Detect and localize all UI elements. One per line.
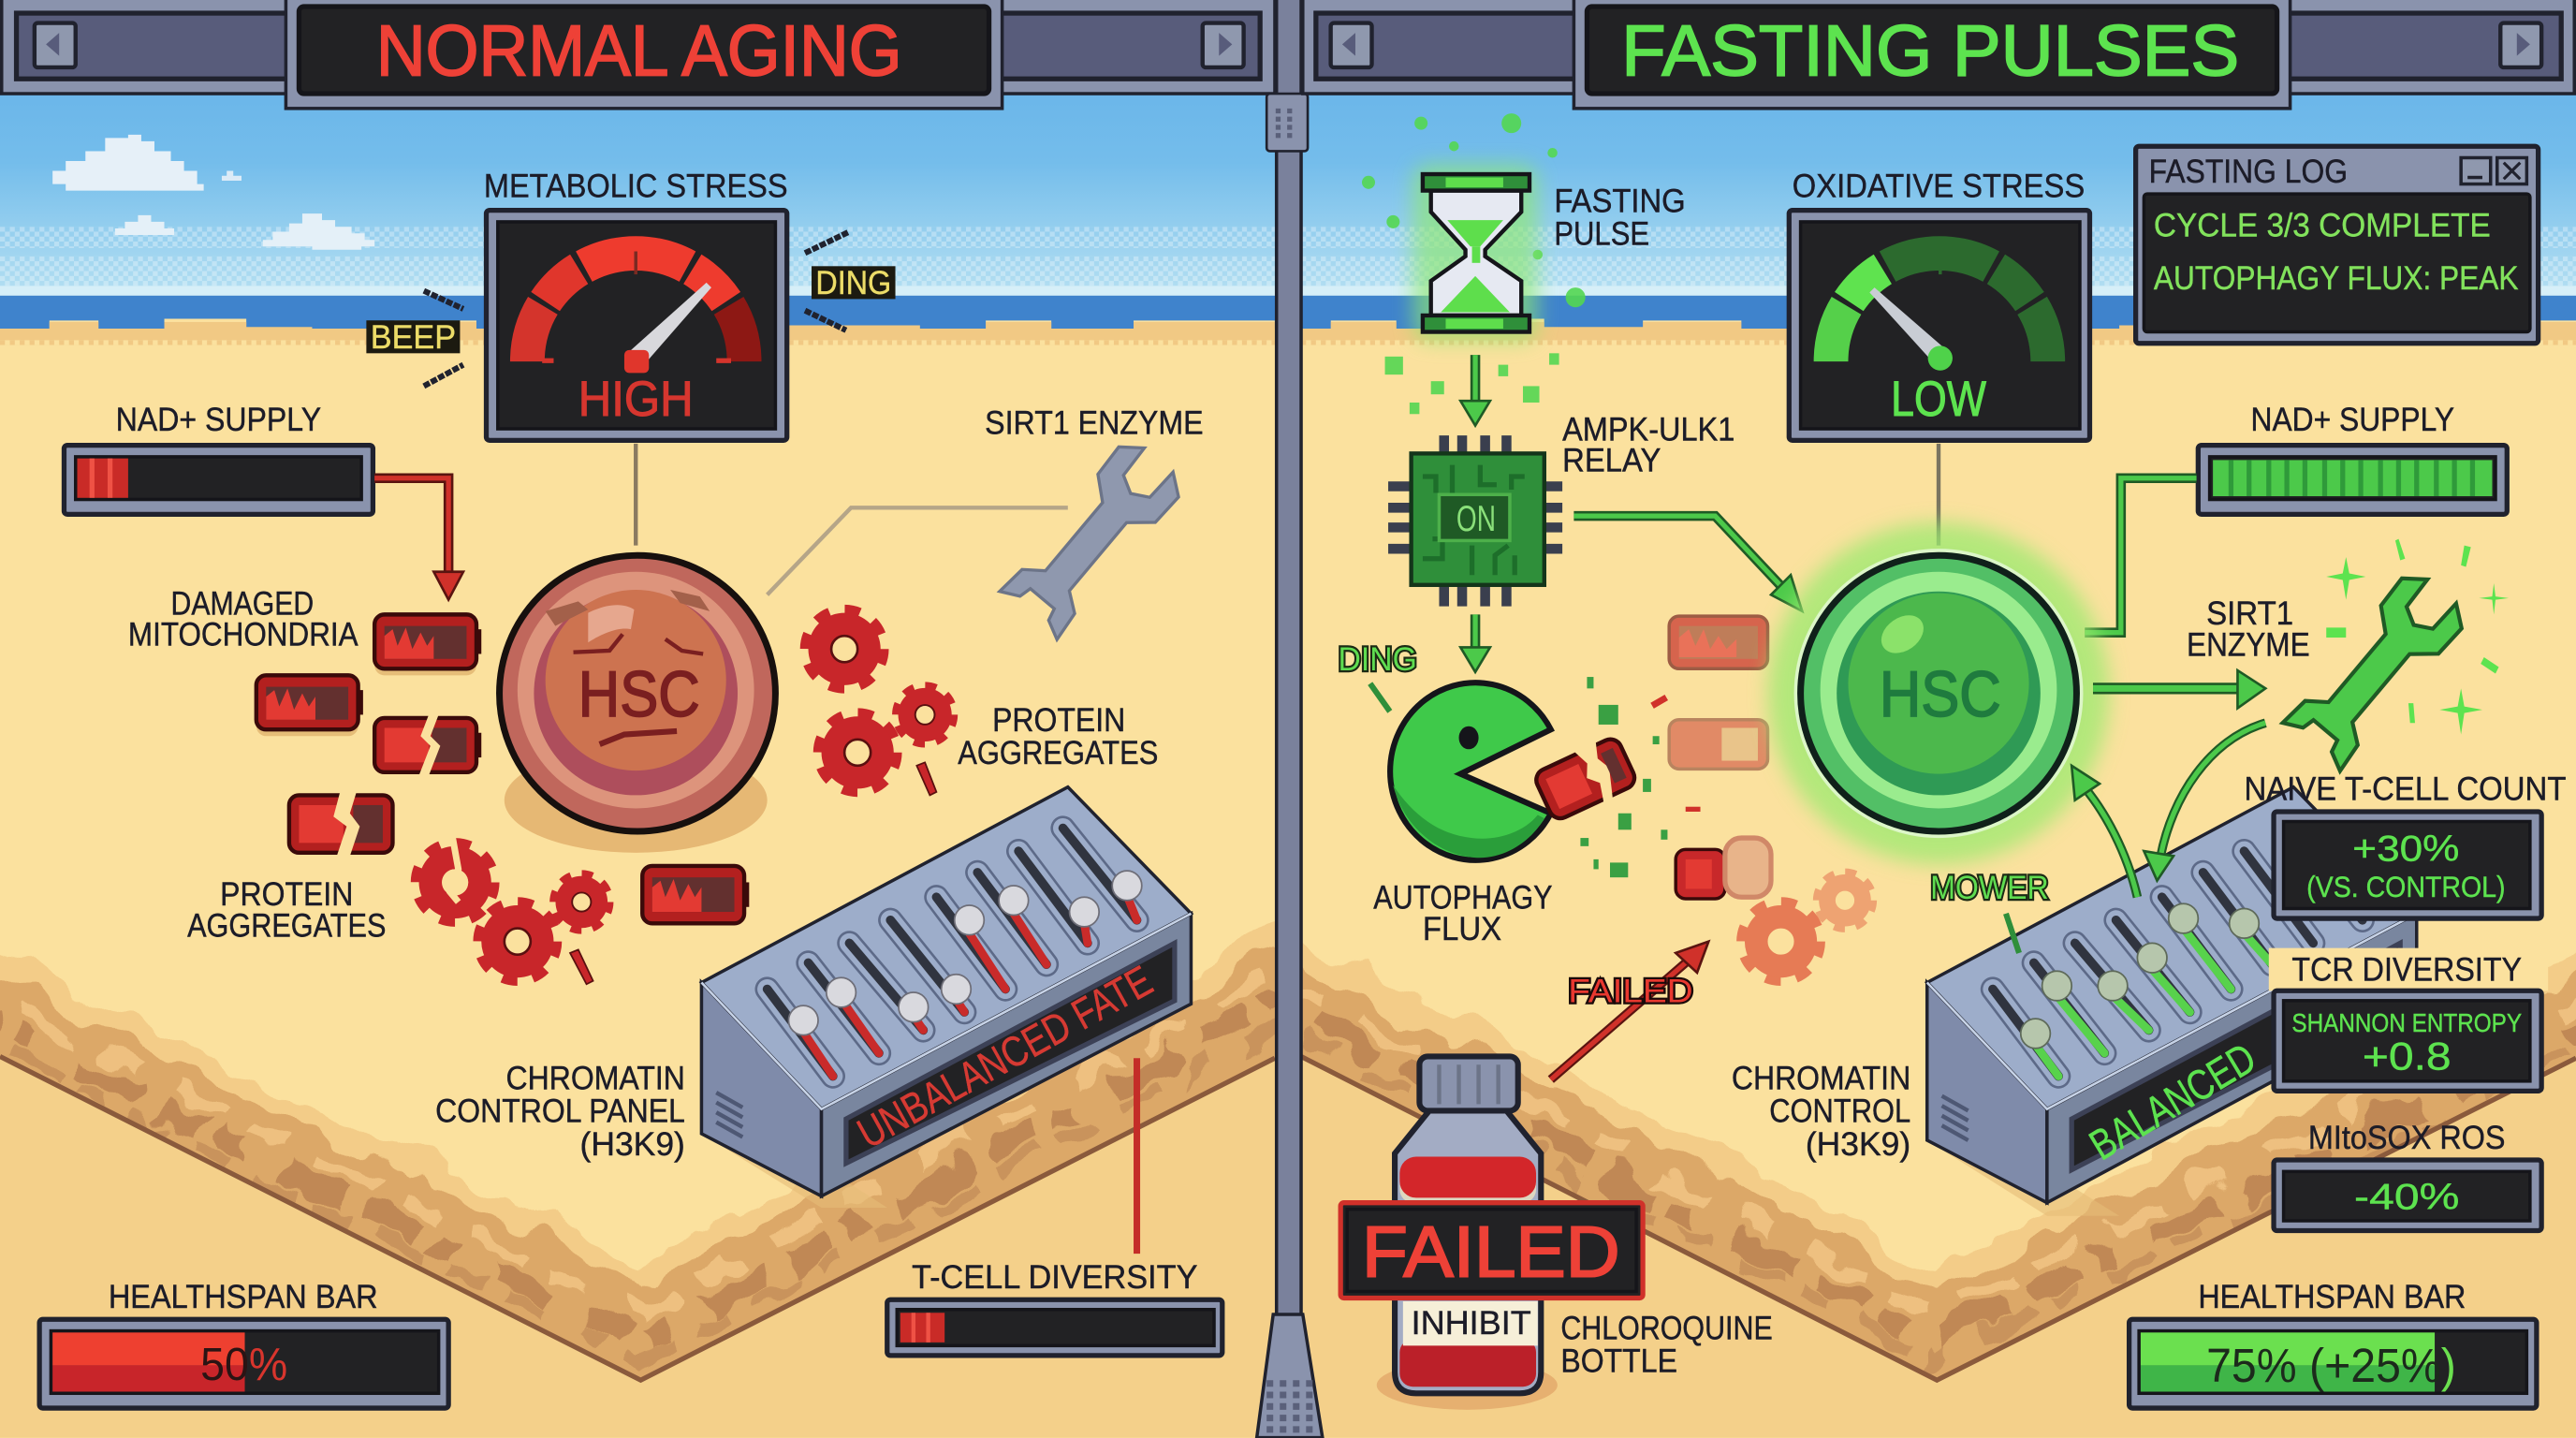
icon: hourglass (1412, 165, 1538, 342)
label: sirt1 enzyme right: SIRT1 (2206, 595, 2293, 632)
label: chromatin control: CONTROL (1769, 1093, 1910, 1130)
label: chloroquine bottle: CHLOROQUINE (1560, 1310, 1773, 1346)
cloud: tiny (222, 171, 242, 181)
chromatin control panel balanced: BALANCED (2082, 1034, 2263, 1169)
title: normal aging: NORMAL AGING (376, 11, 902, 92)
center divider (1257, 0, 1323, 1438)
readout: tcr diversity: SHANNON ENTROPY (2291, 1008, 2522, 1037)
label: ding right (1339, 641, 1417, 712)
icon: eaten mitochondrion (1530, 729, 1640, 825)
sound effect: ding: DING (815, 265, 891, 301)
gauge: metabolic stress high: HIGH (578, 372, 694, 427)
label: fasting pulse: PULSE (1554, 215, 1649, 252)
label: metabolic stress: METABOLIC STRESS (484, 169, 788, 205)
arrow: nad+ to mitochondria (374, 478, 463, 600)
label: chromatin control: CHROMATIN (1732, 1061, 1910, 1097)
readout: naive t-cell count: (VS. CONTROL) (2306, 870, 2506, 903)
icon: red gear 4 (481, 905, 553, 977)
label: damaged mitochondria: MITOCHONDRIA (128, 617, 359, 653)
arrow: relay to hsc (1573, 516, 1802, 611)
label: tcr diversity: TCR DIVERSITY (2291, 952, 2522, 989)
sparkles around wrench (2326, 539, 2509, 734)
label: chromatin control (1732, 1061, 1910, 1163)
label: autophagy flux (1373, 880, 1553, 947)
icon: damaged mitochondrion 5 (642, 866, 749, 923)
button left (35, 23, 76, 67)
icon: chloroquine bottle: INHIBIT (1412, 1305, 1531, 1342)
label: mower: MOWER (1930, 870, 2049, 906)
window: fasting log: AUTOPHAGY FLUX: PEAK (2154, 260, 2519, 297)
label: sirt1 enzyme: SIRT1 ENZYME (985, 404, 1204, 441)
readout: tcr diversity (2274, 990, 2541, 1091)
bar: healthspan 50 percent (39, 1319, 448, 1408)
button left (1331, 23, 1372, 67)
icon: fading mitochondrion 2 (1669, 720, 1767, 769)
icon: gear fragment right (916, 762, 936, 795)
icon: gear fragment left (570, 949, 593, 984)
icon: damaged mitochondrion 2 (256, 675, 363, 736)
icon: fading mitochondrion 1 (1669, 616, 1767, 668)
icon: grey wrench (999, 435, 1189, 640)
label: ding right: DING (1339, 641, 1417, 678)
window: fasting log (2136, 146, 2539, 344)
icon: autophagy pacman (1390, 682, 1551, 860)
label: mitosox ros: MItoSOX ROS (2308, 1120, 2506, 1156)
icon: red gear 1 (809, 613, 881, 685)
label: fasting pulse (1554, 183, 1686, 252)
sound effect: beep (366, 291, 463, 386)
icon: healthy hsc cell (1767, 522, 2110, 864)
arrow: nad+ to hsc (2085, 478, 2197, 633)
readout: naive t-cell count: +30% (2352, 829, 2459, 870)
icon: ampk-ulk1 chip: ON (1456, 499, 1496, 539)
sound effect: beep: BEEP (371, 319, 456, 356)
icon: stressed hsc cell: HSC (578, 658, 700, 730)
bar: nad+ supply low (64, 446, 373, 514)
label: chromatin control: (H3K9) (1806, 1126, 1910, 1163)
connector: panel to t-cell diversity (1135, 1058, 1139, 1254)
header bar left (2, 0, 1275, 109)
bar: healthspan 75 percent: 75% (+25%) (2206, 1339, 2456, 1392)
chromatin control panel balanced (1927, 787, 2417, 1216)
label: fasting pulse: FASTING (1554, 183, 1686, 219)
bar: nad+ supply full (2198, 446, 2507, 514)
label: autophagy flux: AUTOPHAGY (1373, 880, 1553, 917)
icon: stressed hsc cell (500, 555, 775, 853)
icon: chloroquine bottle (1377, 1056, 1558, 1410)
icon: red gear 2 (899, 688, 952, 741)
button right (1203, 23, 1244, 67)
label: protein aggregates left: AGGREGATES (187, 907, 386, 944)
label: failed small: FAILED (1568, 974, 1693, 1010)
label: chromatin control panel (435, 1061, 685, 1163)
label: sirt1 enzyme right: ENZYME (2187, 626, 2310, 663)
title: fasting pulses: FASTING PULSES (1621, 11, 2239, 92)
label: protein aggregates left: PROTEIN (220, 876, 353, 913)
stamp: failed: FAILED (1362, 1212, 1620, 1293)
label: damaged mitochondria (128, 585, 359, 653)
panel: normal aging (2, 0, 1275, 1408)
readout: tcr diversity: +0.8 (2363, 1034, 2452, 1078)
icon: fading mitochondrion 3 (1676, 838, 1771, 899)
label: chloroquine bottle: BOTTLE (1560, 1343, 1677, 1379)
icon: broken red gear (419, 833, 491, 918)
gauge: oxidative stress low: LOW (1891, 372, 1986, 427)
icon: fading gear large (1745, 905, 1817, 977)
label: chromatin control panel: (H3K9) (580, 1126, 685, 1163)
chromatin control panel unbalanced: UNBALANCED FATE (850, 957, 1160, 1157)
readout: naive t-cell count (2274, 812, 2541, 918)
connector: gauge to hsc (635, 444, 637, 546)
arrow: wrench to panel (2144, 723, 2265, 881)
bar: healthspan 75 percent (2130, 1319, 2537, 1408)
sand backing behind readouts (2269, 948, 2548, 990)
icon: damaged mitochondrion 1 (374, 614, 481, 675)
icon: broken mitochondrion 3 (374, 714, 481, 775)
label: chromatin control panel: CONTROL PANEL (435, 1093, 685, 1130)
readout: mitosox ros (2274, 1160, 2541, 1231)
arrow: panel to hsc (2071, 766, 2137, 897)
connector: sirt1 to hsc (768, 507, 1068, 594)
window: fasting log: FASTING LOG (2149, 154, 2348, 190)
cloud: medium (263, 213, 374, 250)
label: mower (1930, 870, 2049, 953)
cloud: small (115, 215, 184, 235)
label: chromatin control panel: CHROMATIN (506, 1061, 685, 1097)
label: nad+ supply: NAD+ SUPPLY (116, 402, 321, 438)
bar: healthspan 50 percent: 50% (200, 1340, 287, 1390)
icon: green wrench (2281, 566, 2472, 772)
label: ampk-ulk1 relay: RELAY (1562, 443, 1661, 479)
sound effect: ding (805, 231, 896, 330)
arrow: hsc to sirt1 wrench (2093, 670, 2265, 708)
label: autophagy flux: FLUX (1423, 911, 1501, 947)
label: ampk-ulk1 relay (1562, 411, 1734, 479)
arrow: failed inhibit (1551, 942, 1708, 1079)
gauge: oxidative stress low (1789, 211, 2089, 440)
icon: broken mitochondrion 4 (289, 792, 392, 856)
panel: fasting pulses (1303, 0, 2574, 1410)
arrow: relay to pacman (1460, 614, 1490, 672)
label: healthspan bar right: HEALTHSPAN BAR (2198, 1279, 2466, 1315)
label: t-cell diversity: T-CELL DIVERSITY (912, 1259, 1197, 1296)
label: damaged mitochondria: DAMAGED (171, 585, 314, 622)
label: protein aggregates left (187, 876, 386, 944)
readout: mitosox ros: -40% (2354, 1178, 2459, 1218)
green particles (1362, 113, 1586, 414)
label: nad+ supply right: NAD+ SUPPLY (2250, 402, 2454, 438)
label: healthspan bar left: HEALTHSPAN BAR (109, 1279, 378, 1315)
label: ampk-ulk1 relay: AMPK-ULK1 (1562, 411, 1734, 448)
icon: red gear 3 (822, 716, 894, 788)
button right (2500, 23, 2541, 67)
label: protein aggregates right: AGGREGATES (958, 735, 1158, 771)
arrow: hourglass to relay (1460, 355, 1490, 426)
icon: fading gear small (1819, 874, 1871, 927)
label: protein aggregates right: PROTEIN (992, 702, 1125, 739)
stamp: failed (1340, 1203, 1643, 1298)
label: oxidative stress: OXIDATIVE STRESS (1793, 169, 2085, 205)
icon: healthy hsc cell: HSC (1880, 658, 2001, 730)
chromatin control panel unbalanced (701, 787, 1191, 1208)
icon: ampk-ulk1 chip (1388, 435, 1562, 607)
label: protein aggregates right (958, 702, 1158, 771)
label: chloroquine bottle (1560, 1310, 1773, 1379)
autophagy debris particles (1580, 677, 1701, 877)
cloud: large (52, 135, 204, 191)
connector: gauge to hsc right (1938, 444, 1939, 546)
gauge: metabolic stress high (487, 211, 787, 440)
window: fasting log: CYCLE 3/3 COMPLETE (2154, 208, 2491, 244)
label: sirt1 enzyme right (2187, 595, 2310, 663)
bar: t-cell diversity low (887, 1299, 1222, 1356)
header bar right (1303, 0, 2574, 109)
icon: red gear 5 (556, 876, 607, 928)
